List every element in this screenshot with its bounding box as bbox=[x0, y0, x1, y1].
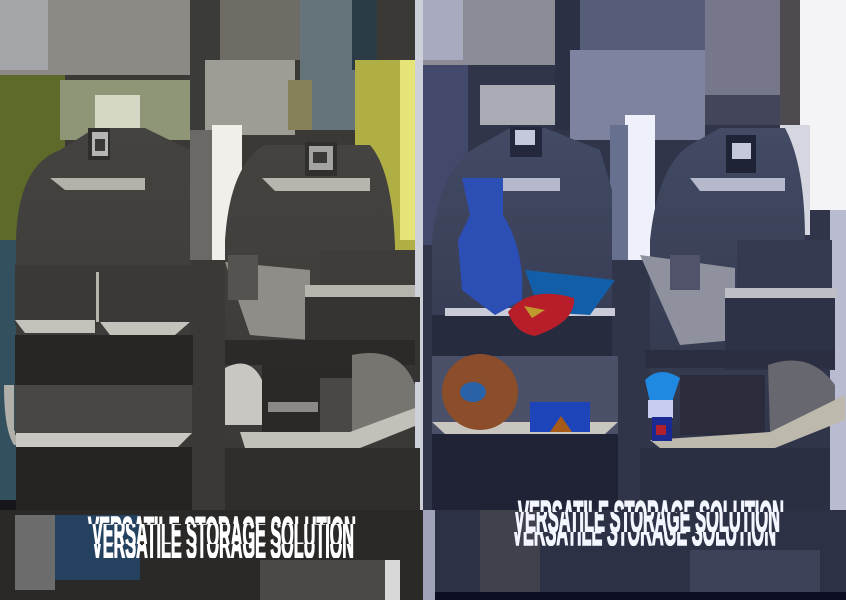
icon: blue toy block bbox=[530, 402, 590, 432]
second seat organizer with mesh pockets bbox=[225, 142, 420, 510]
right headline bbox=[514, 500, 784, 546]
left photo panel: charcoal organizer bbox=[0, 0, 423, 600]
icon: orange ball bbox=[442, 354, 518, 430]
icon: red toy shape bbox=[508, 294, 574, 336]
infographic canvas: VERSATILE STORAGE SOLUTION bbox=[92, 510, 354, 557]
icon: orange triangle on block bbox=[550, 416, 572, 432]
left seat organizer bbox=[4, 128, 193, 512]
left headline bbox=[88, 516, 356, 558]
infographic canvas: VERSATILE STORAGE SOLUTION bbox=[92, 520, 354, 567]
icon: small toy figure bbox=[645, 372, 680, 441]
left floor area bbox=[0, 510, 423, 600]
right photo panel: navy organizer bbox=[423, 0, 846, 600]
icon: yellow toy detail bbox=[524, 306, 545, 318]
infographic canvas: VERSATILE STORAGE SOLUTION bbox=[88, 508, 356, 555]
fourth seat organizer bbox=[640, 128, 845, 510]
icon: blue toy cape bbox=[525, 270, 615, 315]
icon: blue plush toy bbox=[458, 178, 522, 315]
third seat organizer bbox=[432, 127, 618, 510]
right floor area bbox=[423, 510, 846, 600]
icon: blue spot on ball bbox=[460, 382, 486, 402]
